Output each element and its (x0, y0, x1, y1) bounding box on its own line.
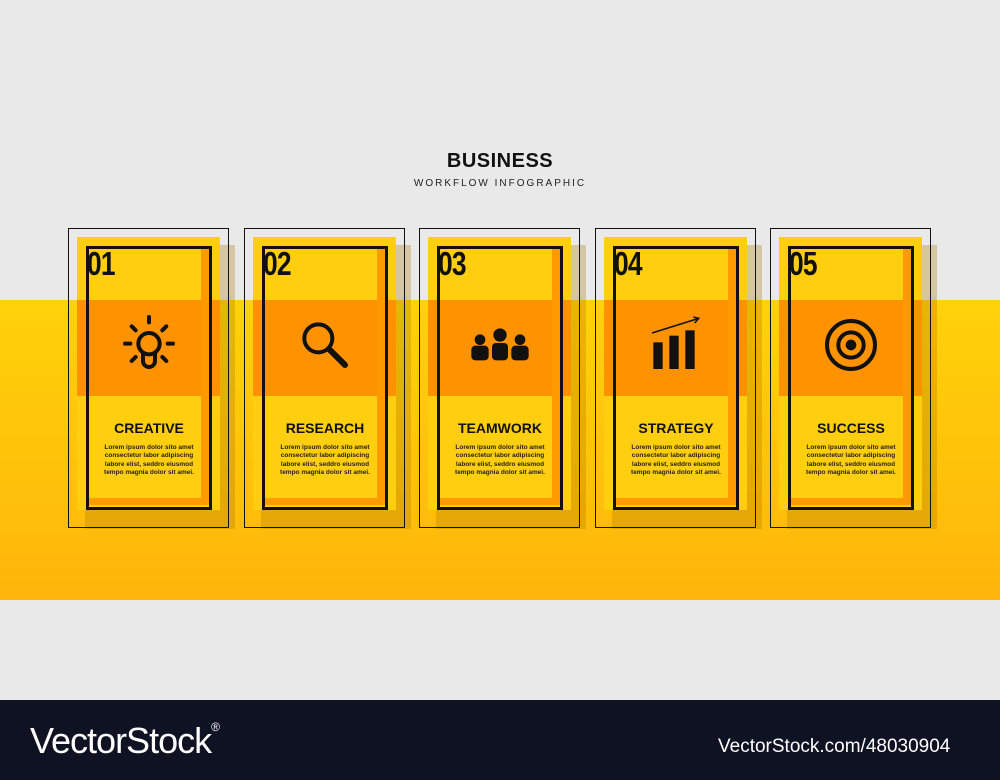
text block: Lorem ipsum dolor sito amet (631, 444, 721, 451)
text block: tempo magnia dolor sit amei. (104, 469, 194, 476)
text block (631, 444, 721, 476)
text block: consectetur labor adipiscing (281, 452, 369, 459)
text block: labore elist, seddro eiusmod (807, 461, 895, 468)
text block (280, 444, 370, 476)
number 01: 01 (87, 245, 115, 282)
text block: Lorem ipsum dolor sito amet (104, 444, 194, 451)
number 02: 02 (263, 245, 291, 282)
text block: consectetur labor adipiscing (632, 452, 720, 459)
footer (0, 700, 1000, 780)
text block: consectetur labor adipiscing (105, 452, 193, 459)
heading: CREATIVE (114, 420, 184, 436)
number 03: 03 (438, 245, 466, 282)
text block: labore elist, seddro eiusmod (281, 461, 369, 468)
yellow band (0, 300, 1000, 600)
card 03 teamwork (419, 228, 586, 529)
text block (455, 444, 545, 476)
title (414, 150, 586, 189)
heading: STRATEGY (638, 420, 714, 436)
card 02 research (244, 228, 411, 529)
icon: target (825, 319, 877, 371)
heading: TEAMWORK (458, 420, 542, 436)
text block: consectetur labor adipiscing (807, 452, 895, 459)
card 04 strategy (595, 228, 762, 529)
number 05: 05 (789, 245, 817, 282)
icon: team (471, 328, 529, 360)
icon: magnifier (302, 322, 348, 368)
text block: Lorem ipsum dolor sito amet (280, 444, 370, 451)
text block: Lorem ipsum dolor sito amet (806, 444, 896, 451)
title: WORKFLOW INFOGRAPHIC (414, 178, 586, 189)
heading: SUCCESS (817, 420, 885, 436)
heading: RESEARCH (286, 420, 364, 436)
card 01 creative (68, 228, 235, 529)
footer: VectorStock® (30, 720, 219, 761)
text block: labore elist, seddro eiusmod (632, 461, 720, 468)
text block: labore elist, seddro eiusmod (456, 461, 544, 468)
number 04: 04 (614, 245, 642, 282)
text block: tempo magnia dolor sit amei. (455, 469, 545, 476)
text block: consectetur labor adipiscing (456, 452, 544, 459)
text block: labore elist, seddro eiusmod (105, 461, 193, 468)
text block: Lorem ipsum dolor sito amet (455, 444, 545, 451)
text block: tempo magnia dolor sit amei. (631, 469, 721, 476)
text block (104, 444, 194, 476)
text block (806, 444, 896, 476)
text block: tempo magnia dolor sit amei. (806, 469, 896, 476)
footer: VectorStock.com/48030904 (718, 736, 950, 757)
icon: bar chart (652, 316, 700, 369)
title: BUSINESS (447, 150, 553, 172)
card 05 success (770, 228, 937, 529)
text block: tempo magnia dolor sit amei. (280, 469, 370, 476)
icon: lightbulb (123, 315, 175, 369)
